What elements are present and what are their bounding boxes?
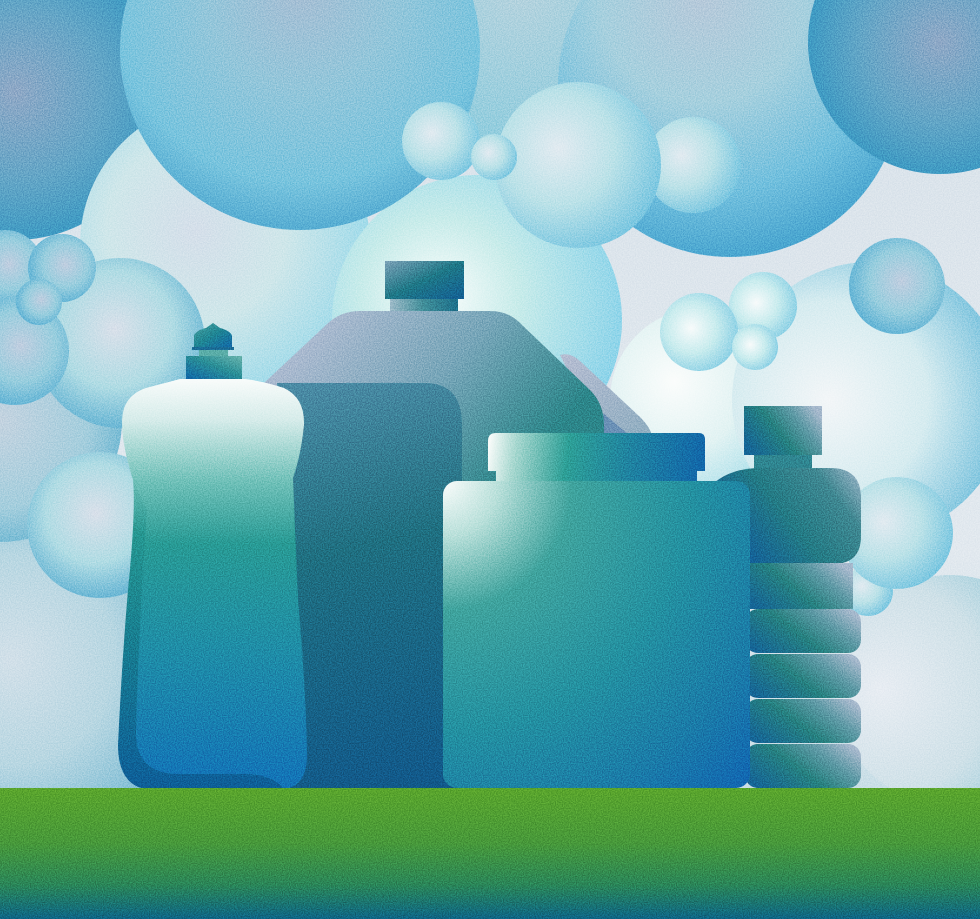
jar body	[443, 481, 750, 788]
ground	[0, 788, 980, 919]
jar lid	[488, 433, 705, 471]
jug body	[264, 311, 604, 788]
bottle: ribbed bottle	[715, 406, 861, 788]
bottle: square jar	[443, 433, 750, 788]
jug front panel	[277, 383, 462, 788]
dish soap cap	[186, 323, 242, 379]
ribbed bottle cap	[744, 406, 822, 455]
small bubbles	[0, 82, 953, 616]
ribbed bottle ribs	[745, 563, 861, 788]
bottle: dish soap	[118, 323, 307, 790]
dish soap back layer	[118, 478, 307, 790]
jug cap	[385, 261, 464, 299]
bottle: gallon jug	[264, 261, 652, 788]
jar neck	[496, 470, 697, 482]
ribbed bottle shoulder	[715, 468, 861, 564]
dish soap body	[122, 379, 307, 789]
jug neck	[390, 299, 458, 312]
ribbed bottle neck	[754, 455, 812, 469]
jug handle	[560, 354, 652, 436]
